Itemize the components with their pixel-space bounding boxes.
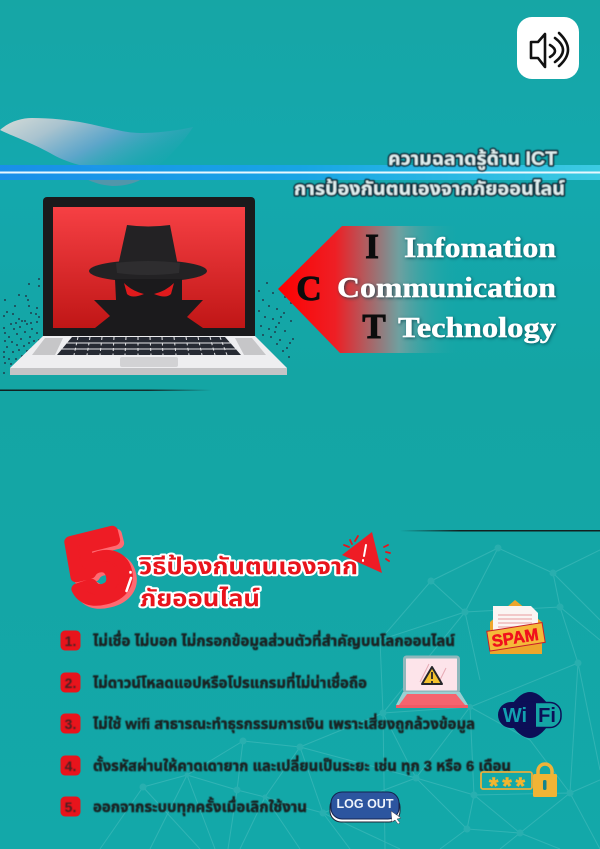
pixel dust around laptop bbox=[3, 278, 294, 374]
section heading: ภัยออนไลน์ bbox=[140, 585, 260, 611]
item 3: ไม่ใช้ wifi สาธารณะทำธุรกรรมการเงิน เพราะเสี่ยงถูกล้วงข้อมูล bbox=[93, 713, 475, 734]
icon: megaphone bbox=[342, 532, 390, 573]
touchpad bbox=[120, 357, 178, 367]
item 3: 3. bbox=[65, 716, 76, 732]
icon: wifi logo bbox=[498, 692, 561, 738]
item 1: ไม่เชื่อ ไม่บอก ไม่กรอกข้อมูลส่วนตัวที่สำคัญบนโลกออนไลน์ bbox=[93, 630, 455, 651]
list: five ways bbox=[60, 630, 511, 816]
laptop screen bezel bbox=[43, 197, 255, 336]
keyboard bbox=[57, 337, 241, 355]
title: การป้องกันตนเองจากภัยออนไลน์ bbox=[294, 178, 565, 200]
item 4: 4. bbox=[65, 758, 76, 774]
icon: spam envelope bbox=[487, 600, 545, 654]
Technology label: Technology bbox=[398, 313, 556, 344]
icon: log out button bbox=[330, 792, 401, 824]
hacker eyes bbox=[124, 283, 174, 296]
icon: speaker button bbox=[517, 17, 579, 79]
right speaker bbox=[235, 338, 266, 355]
laptop base bbox=[10, 336, 287, 375]
ICT arrow block bbox=[278, 226, 556, 353]
letter I: I bbox=[365, 227, 379, 266]
red screen bbox=[53, 207, 245, 328]
icon: wifi logo: Wi bbox=[503, 705, 527, 727]
blue light band bbox=[0, 165, 600, 180]
Communication label: Communication bbox=[337, 273, 556, 304]
title: ความฉลาดรู้ด้าน ICT bbox=[388, 148, 557, 170]
item 2: ไม่ดาวน์โหลดแอปหรือโปรแกรมที่ไม่น่าเชื่อถือ bbox=[93, 672, 367, 692]
section heading: วิธีป้องกันตนเองจาก bbox=[138, 553, 358, 579]
item 4: ตั้งรหัสผ่านให้คาดเดายาก และเปลี่ยนเป็นระยะ เช่น ทุก 3 หรือ 6 เดือน bbox=[93, 755, 511, 775]
network mesh background bbox=[100, 544, 600, 849]
title bbox=[294, 148, 565, 200]
item 1: 1. bbox=[65, 633, 76, 649]
letter T: T bbox=[362, 307, 386, 346]
letter C: C bbox=[296, 269, 322, 308]
left speaker bbox=[32, 338, 63, 355]
icon: log out button: LOG OUT bbox=[336, 797, 394, 811]
red gradient arrow bbox=[278, 226, 470, 353]
laptop with hacker bbox=[10, 197, 287, 375]
icon: warning laptop bbox=[396, 657, 468, 708]
icon: wifi logo: Fi bbox=[538, 705, 556, 727]
big number 5: 5 bbox=[58, 511, 139, 624]
big number 5: 5 bbox=[62, 514, 143, 627]
hacker silhouette bbox=[89, 225, 207, 335]
icon: password lock bbox=[481, 764, 557, 800]
divider lines bbox=[0, 390, 600, 532]
section heading bbox=[138, 553, 358, 611]
decorative wave bbox=[0, 118, 193, 186]
icon: spam envelope: SPAM bbox=[490, 625, 540, 651]
item 2: 2. bbox=[65, 675, 76, 691]
item 5: ออกจากระบบทุกครั้งเมื่อเลิกใช้งาน bbox=[93, 796, 307, 816]
item 5: 5. bbox=[65, 799, 76, 815]
icon: password lock: *** bbox=[489, 773, 529, 800]
Information label: Infomation bbox=[404, 233, 556, 264]
